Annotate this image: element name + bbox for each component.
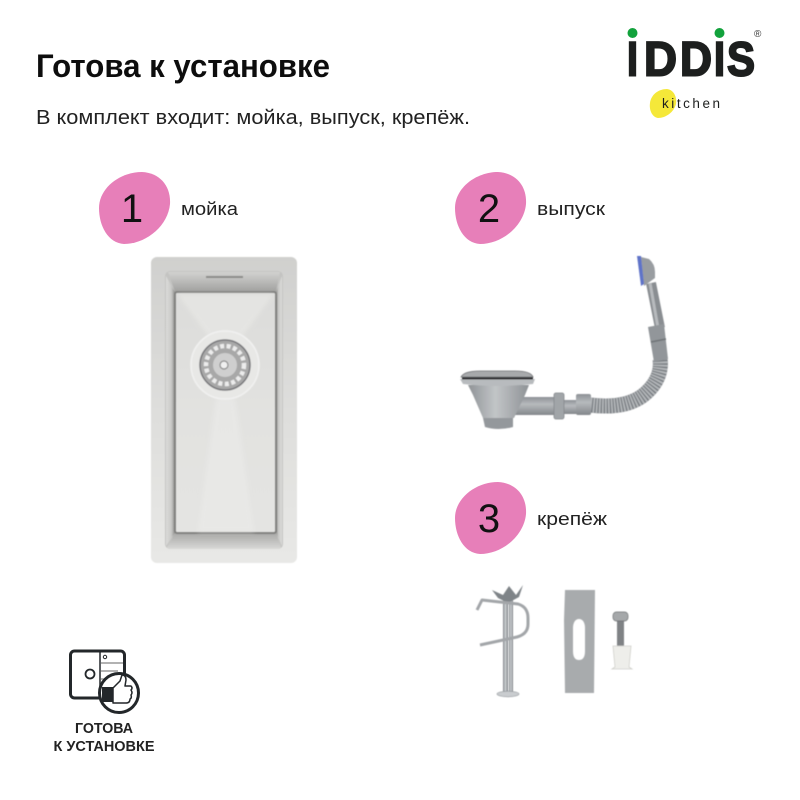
sink outline [70, 651, 124, 698]
threaded outlet [483, 418, 513, 429]
floor [175, 292, 276, 533]
upper connector [648, 324, 668, 362]
threaded rods [503, 600, 508, 693]
kitchen label: kitchen [662, 96, 720, 111]
logo wordmark: D [644, 34, 677, 86]
step 1 label: мойка [181, 199, 239, 219]
step 3 badge [455, 482, 526, 554]
side walls [166, 276, 175, 546]
fasteners photo [477, 585, 632, 697]
logo wordmark: S [727, 34, 755, 86]
registered mark: ® [754, 29, 762, 40]
step 3 badge: 3 [478, 497, 500, 541]
horizontal pipe [510, 397, 556, 415]
white plug [612, 646, 632, 669]
thumbs up badge [100, 674, 138, 712]
floor highlights [198, 398, 254, 532]
subtitle: В комплект входит: мойка, выпуск, крепёж. [36, 107, 470, 129]
step 1 badge [99, 172, 170, 244]
icon caption: К УСТАНОВКЕ [54, 739, 155, 755]
step 2 badge [455, 172, 526, 244]
logo wordmark: I [627, 34, 638, 86]
upper tube [651, 283, 660, 328]
drain strainer [200, 340, 250, 390]
drain assembly photo [460, 256, 668, 429]
bolt head [613, 612, 628, 621]
metal dome [461, 371, 533, 377]
nut [554, 393, 564, 419]
logo green dots [628, 28, 724, 38]
blue overflow plate [637, 256, 644, 286]
logo wordmark: I [714, 34, 725, 86]
saddle [492, 585, 523, 603]
logo wordmark: D [680, 34, 712, 86]
corrugated hose [590, 359, 660, 406]
flange [460, 379, 535, 386]
step 3 label: крепёж [537, 509, 607, 529]
wire clip [477, 600, 528, 645]
icon caption [54, 721, 155, 755]
slotted plate [564, 590, 595, 693]
step 1 badge: 1 [121, 187, 143, 231]
overflow slot [206, 276, 243, 278]
back wall [168, 272, 280, 292]
collar [576, 394, 591, 415]
step 2 badge: 2 [478, 187, 500, 231]
sink photo [151, 257, 297, 563]
front wall [167, 533, 281, 549]
drain ring [191, 331, 259, 399]
logo: IDDIS kitchen [627, 28, 762, 118]
overflow head [641, 257, 655, 286]
yellow blob [650, 89, 676, 118]
bolt shaft [617, 621, 624, 646]
title: Готова к установке [36, 48, 330, 84]
step 2 label: выпуск [537, 199, 605, 219]
rod head [497, 691, 519, 697]
gasket [462, 377, 533, 380]
ready to install icon [70, 651, 138, 712]
logo wordmark [627, 34, 755, 86]
icon caption: ГОТОВА [75, 721, 134, 737]
funnel body [468, 385, 529, 418]
